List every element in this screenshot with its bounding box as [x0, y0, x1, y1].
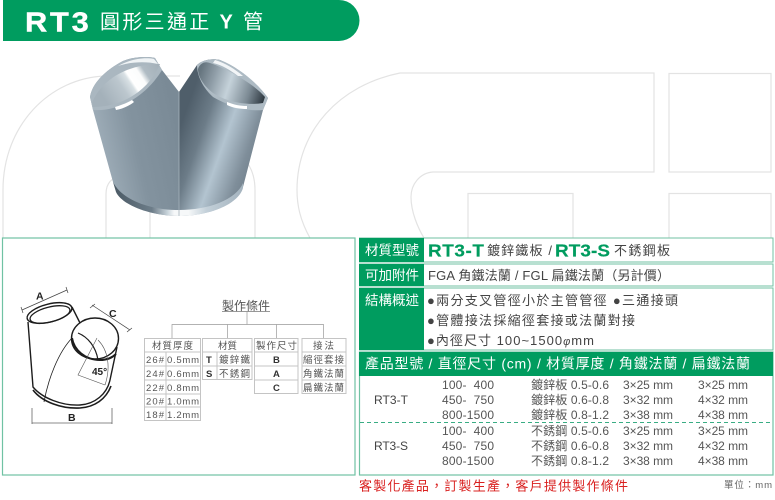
rows: RT3-S: 4×32 mm	[698, 439, 748, 453]
right branch body	[179, 59, 268, 216]
heading: manufacturing conditions: 製作條件	[222, 299, 270, 313]
table: joining method: 扁鐵法蘭	[303, 382, 344, 394]
tree connector	[172, 312, 324, 338]
rows: RT3-S: 不銹鋼 0.5-0.6	[531, 423, 609, 438]
unit label: 單位：mm	[724, 479, 772, 491]
panel: specification table	[359, 352, 773, 475]
table: material: 材質	[218, 340, 237, 352]
table: material thickness: 0.5mm	[167, 355, 199, 366]
background outline pattern	[3, 73, 771, 238]
table: material thickness: 26#	[146, 355, 165, 366]
row: structure overview: 結構概述	[365, 293, 420, 308]
row: material and model: RT3-S	[555, 240, 610, 260]
45 degree angle mark: 45°	[92, 367, 107, 378]
rows: RT3-T: 4×38 mm	[698, 408, 748, 422]
rows: RT3-T: 3×25 mm	[698, 378, 748, 392]
rows: RT3-T: 3×38 mm	[623, 408, 673, 422]
dimension A	[21, 287, 68, 313]
dimension B: B	[68, 412, 76, 424]
rows: RT3-T: 4×32 mm	[698, 393, 748, 407]
title banner	[3, 0, 359, 41]
table header bar	[359, 352, 773, 376]
rows: RT3-S: RT3-S	[374, 439, 408, 453]
table: material thickness: 18#	[146, 410, 165, 421]
table: material thickness: 20#	[146, 396, 165, 408]
table: fabrication size: A	[273, 369, 280, 380]
row: optional accessories: FGA 角鐵法蘭 / FGL 扁鐵法蘭（另計價）	[428, 268, 670, 283]
left branch rim	[90, 57, 162, 110]
row: optional accessories	[359, 264, 773, 286]
rows: RT3-T: 3×32 mm	[623, 393, 673, 407]
rows: RT3-S: 3×38 mm	[623, 454, 673, 468]
table: joining method	[302, 338, 346, 394]
rows: RT3-T	[374, 377, 748, 422]
table: material: T	[206, 355, 212, 366]
divider between models	[360, 422, 773, 424]
table: joining method: 接法	[313, 340, 334, 352]
centre seam	[178, 92, 180, 216]
row: material and model: 不銹鋼板	[614, 243, 670, 258]
rows: RT3-S: 800-1500	[442, 454, 494, 468]
table: fabrication size: 製作尺寸	[256, 340, 297, 352]
footer note: custom production: 客製化產品，訂製生產，客戶提供製作條件	[359, 478, 628, 494]
rows: RT3-T: RT3-T	[374, 393, 409, 407]
table: material: 不銹鋼	[219, 368, 250, 380]
table: material: 鍍鋅鐵	[219, 354, 250, 366]
rows: RT3-S: 3×32 mm	[623, 439, 673, 453]
table header bar: 產品型號 / 直徑尺寸 (cm) / 材質厚度 / 角鐵法蘭 / 扁鐵法蘭	[365, 356, 750, 372]
rows: RT3-S: 不銹鋼 0.6-0.8	[531, 438, 609, 453]
table: material thickness: 24#	[146, 369, 165, 380]
row: structure overview: ●兩分支叉管徑小於主管管徑 ●三通接頭	[427, 293, 678, 308]
table: joining method: 縮徑套接	[303, 354, 344, 366]
table: material thickness	[144, 338, 200, 421]
dimension A: A	[36, 290, 44, 302]
title: product name: 圓形三通正 Y 管	[100, 10, 263, 34]
rows: RT3-T: 鍍鋅板 0.6-0.8	[531, 392, 609, 407]
rows: RT3-T: 鍍鋅板 0.8-1.2	[531, 407, 609, 422]
table: joining method: 角鐵法蘭	[303, 368, 344, 380]
rows: RT3-S: 3×25 mm	[623, 424, 673, 438]
rows: RT3-S: 不銹鋼 0.8-1.2	[531, 453, 609, 468]
table: material thickness: 0.6mm	[167, 369, 199, 380]
rows: RT3-S: 3×25 mm	[698, 424, 748, 438]
rows: RT3-T: 3×25 mm	[623, 378, 673, 392]
table: material thickness: 材質厚度	[152, 340, 193, 352]
rows: RT3-T: 450- 750	[442, 393, 494, 407]
title: product code: RT3	[25, 7, 89, 38]
table: material thickness: 1.2mm	[167, 410, 199, 421]
table: material thickness: 0.8mm	[167, 383, 199, 394]
rows: RT3-S: 100- 400	[442, 424, 494, 438]
table: fabrication size	[254, 338, 298, 394]
table: material thickness: 1.0mm	[167, 396, 199, 408]
table: material	[202, 338, 252, 380]
panel: manufacturing diagram	[2, 238, 355, 475]
row: material and model: 材質型號	[365, 243, 420, 258]
product photo: round Y pipe	[90, 57, 268, 216]
dimension C: C	[109, 308, 117, 320]
rows: RT3-S: 4×38 mm	[698, 454, 748, 468]
table: material: S	[206, 369, 212, 380]
left branch opening	[92, 64, 160, 107]
row: optional accessories: 可加附件	[365, 268, 419, 283]
row: structure overview: ●管體接法採縮徑套接或法蘭對接	[427, 313, 635, 328]
technical drawing of Y pipe	[25, 299, 118, 408]
left branch body	[90, 57, 179, 216]
row: structure overview	[359, 288, 773, 350]
dimension C	[90, 304, 132, 332]
table: material thickness: 22#	[146, 383, 165, 394]
row: material and model: RT3-T	[428, 240, 485, 260]
row: material and model: 鍍鋅鐵板 /	[487, 243, 552, 258]
rows: RT3-T: 800-1500	[442, 408, 494, 422]
bottom flange	[113, 182, 243, 216]
row: structure overview: ●內徑尺寸 100~1500φmm	[427, 333, 594, 348]
rows: RT3-T: 鍍鋅板 0.5-0.6	[531, 377, 609, 392]
rows: RT3-T: 100- 400	[442, 378, 494, 392]
right branch opening	[197, 59, 268, 110]
45 degree angle mark	[78, 338, 108, 385]
rows: RT3-S: 450- 750	[442, 439, 494, 453]
rows: RT3-S	[374, 423, 748, 468]
table: fabrication size: B	[273, 355, 280, 366]
dimension B	[32, 408, 112, 424]
table: fabrication size: C	[273, 383, 280, 394]
row: material and model	[359, 238, 773, 262]
